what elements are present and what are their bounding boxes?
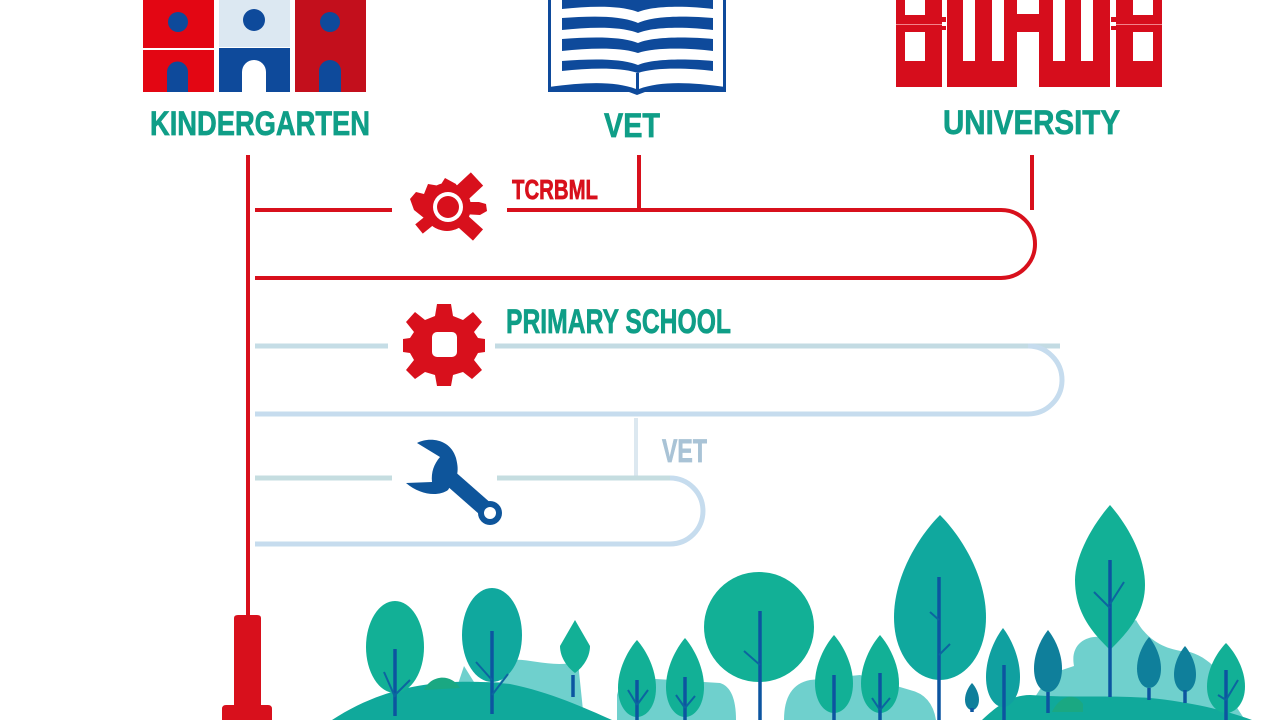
- icon: university building: [896, 0, 1162, 87]
- pathway: vet track: [255, 418, 703, 544]
- main red vertical line with base: [222, 155, 272, 720]
- tree branches: [384, 582, 1238, 710]
- pathway: red track: [255, 155, 1035, 278]
- panel: kindergarten: [143, 0, 370, 143]
- illustration: forest landscape: [332, 505, 1252, 720]
- label: vet: VET: [604, 107, 660, 145]
- icon: open book: [549, 0, 725, 95]
- label: light vet: VET: [662, 433, 707, 469]
- tree crowns: [366, 505, 1245, 717]
- dark hills: [332, 682, 1252, 720]
- small green bumps: [424, 678, 1083, 712]
- icon: red gear: [403, 304, 485, 386]
- icon: broken red gear and wrench: [410, 178, 487, 235]
- label: university: UNIVERSITY: [943, 104, 1120, 142]
- panel: vet: [549, 0, 725, 145]
- pathway: primary school track: [255, 346, 1062, 414]
- label: kindergarten: KINDERGARTEN: [150, 105, 370, 143]
- label: red track: TCRBML: [512, 174, 598, 205]
- panel: university: [896, 0, 1162, 142]
- light hills: [456, 620, 1245, 720]
- icon: kindergarten building: [143, 0, 366, 92]
- label: primary school: PRIMARY SCHOOL: [506, 303, 731, 341]
- tree trunks: [395, 560, 1226, 720]
- icon: blue wrench: [406, 440, 502, 525]
